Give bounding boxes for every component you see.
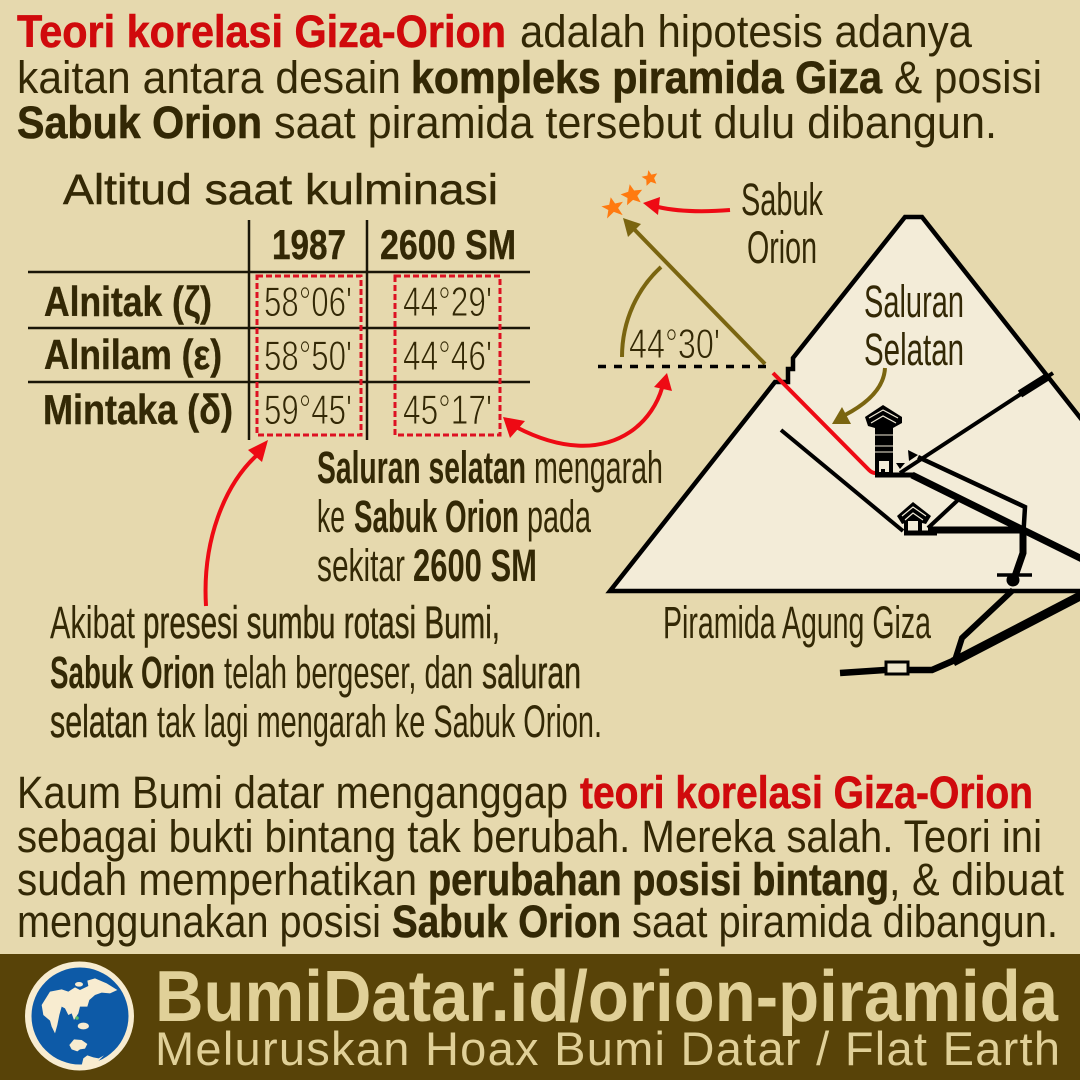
king's chamber	[865, 405, 913, 475]
arrow: to southern shaft	[832, 368, 885, 424]
label: Sabuk Orion: Orion	[747, 222, 817, 273]
intro heading text: kompleks piramida Giza	[411, 52, 883, 103]
intro heading text: Sabuk Orion	[17, 97, 262, 148]
altitude table: 58°50'	[264, 332, 352, 379]
intro heading text: & posisi	[894, 52, 1042, 103]
double-headed arrow: table to angle	[503, 373, 672, 446]
altitude table: 2600 SM	[380, 221, 516, 268]
altitude table: 58°06'	[264, 278, 352, 325]
arrow: red pointer to Orion's belt	[643, 197, 730, 215]
label: Saluran Selatan: Selatan	[864, 324, 964, 375]
stars: Orion's belt	[600, 169, 659, 219]
altitude table: Alnitak (ζ)	[44, 278, 212, 325]
label: Saluran Selatan: Saluran	[864, 276, 964, 327]
intro heading text: Teori korelasi Giza-Orion	[17, 6, 506, 57]
label: Sabuk Orion: Sabuk	[741, 174, 823, 225]
text: precession note	[50, 597, 602, 747]
text: precession note: presesi sumbu rotasi Bumi,	[143, 597, 500, 648]
closing paragraph: Kaum Bumi datar menganggap	[17, 767, 568, 818]
intro heading text: kaitan antara desain	[17, 52, 401, 103]
footer band	[0, 954, 1080, 1080]
text: southern shaft note: mengarah	[534, 442, 663, 493]
text: southern shaft note: 2600 SM	[413, 540, 537, 591]
arrow: shaft direction towards stars	[623, 218, 765, 364]
footer tagline: Meluruskan Hoax Bumi Datar / Flat Earth	[155, 1022, 1060, 1075]
text: precession note: saluran	[482, 647, 581, 698]
closing paragraph: sudah memperhatikan	[17, 854, 417, 905]
horizon dashed line	[598, 365, 768, 368]
queen's chamber	[897, 502, 937, 533]
text: southern shaft note: Saluran selatan	[317, 442, 526, 493]
table heading: altitude at culmination: Altitud saat kulminasi	[63, 166, 498, 214]
angle arc	[622, 267, 661, 357]
angle value: 44°30'	[629, 320, 720, 367]
text: southern shaft note	[317, 442, 663, 591]
arrow: from precession note to 1987 column	[206, 440, 268, 606]
intro heading text: saat piramida tersebut dulu dibangun.	[274, 97, 997, 148]
altitude table: Alnilam (ε)	[44, 331, 222, 378]
text: precession note: telah bergeser, dan	[224, 647, 473, 698]
altitude table: 44°29'	[403, 278, 492, 325]
text: southern shaft note: sekitar	[317, 540, 405, 591]
intro heading text	[17, 6, 1042, 148]
altitude table: 44°46'	[403, 332, 492, 379]
internal passages	[840, 377, 1080, 673]
subterranean chamber	[886, 662, 908, 674]
altitude table: 59°45'	[264, 386, 352, 433]
queen's chamber south shaft	[781, 430, 903, 531]
altitude table: Mintaka (δ)	[43, 386, 233, 433]
icon: globe logo	[25, 962, 134, 1070]
text: southern shaft note: pada	[527, 491, 592, 542]
altitude table	[28, 220, 530, 440]
label: Piramida Agung Giza: Piramida Agung Giza	[663, 597, 932, 648]
text: southern shaft note: ke	[317, 491, 345, 542]
altitude table: 1987	[272, 221, 346, 268]
label: Sabuk Orion	[741, 174, 823, 273]
text: precession note: tak lagi mengarah ke Sabuk Orion.	[157, 696, 602, 747]
label: Saluran Selatan	[864, 276, 964, 375]
text: precession note: Sabuk Orion	[50, 647, 215, 698]
closing paragraph: perubahan posisi bintang	[428, 854, 889, 905]
closing paragraph: , & dibuat	[889, 854, 1064, 905]
intro heading text: adalah hipotesis adanya	[520, 6, 973, 57]
king's chamber north shaft	[900, 373, 1053, 473]
red line: southern shaft	[773, 373, 875, 473]
closing paragraph: Sabuk Orion	[392, 896, 621, 947]
great pyramid cross-section	[610, 217, 1080, 674]
closing paragraph: menggunakan posisi	[17, 896, 381, 947]
text: southern shaft note: Sabuk Orion	[354, 491, 519, 542]
altitude table: 45°17'	[403, 386, 492, 433]
text: precession note: Akibat	[50, 597, 135, 648]
closing paragraph	[17, 767, 1064, 947]
text: precession note: selatan	[50, 696, 148, 747]
antechamber	[896, 450, 918, 469]
